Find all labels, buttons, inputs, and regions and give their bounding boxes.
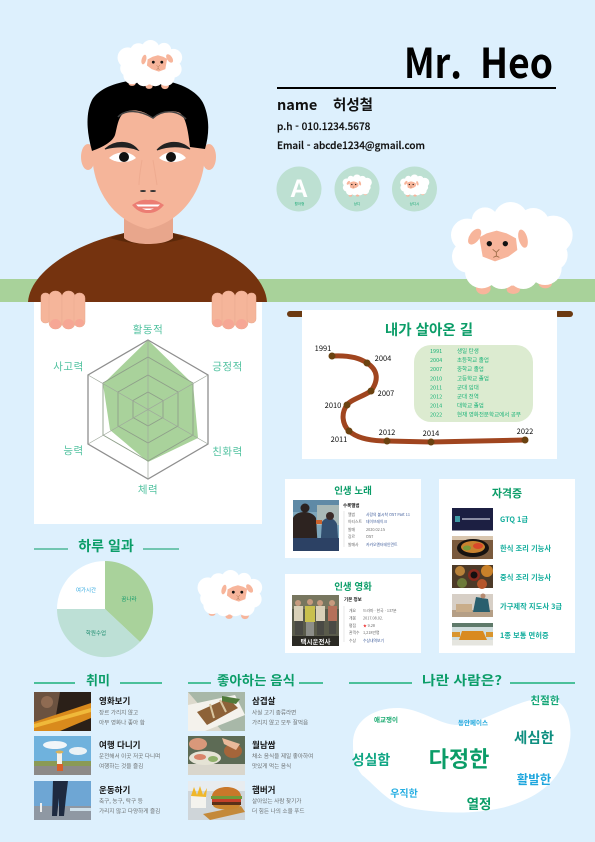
ears	[81, 144, 95, 170]
title: Mr.	[404, 30, 462, 90]
song info: 발매사	[348, 542, 359, 548]
hobby: exercise: 운동하기	[99, 784, 130, 796]
email: Email - abcde1234@gmail.com	[277, 137, 425, 152]
history list: 생일 탄생	[457, 347, 479, 355]
badges	[276, 166, 437, 212]
badge: A	[276, 166, 322, 212]
sheep on head	[118, 40, 182, 89]
pie label: leisure: 여가시간	[76, 586, 96, 594]
hobby: movies: 장르 가리지 않고	[99, 708, 138, 716]
cert 1	[452, 508, 528, 530]
section heading: daily routine: 하루 일과	[78, 536, 134, 556]
badge: A: 활아형	[295, 201, 304, 207]
radar label: 사고력: 사고력	[53, 359, 84, 374]
radar label: 능력: 능력	[63, 443, 84, 458]
korean name: 허성철	[333, 94, 373, 115]
movie info: 기본 정보	[344, 596, 362, 603]
hobby: travel: 여행하는 것을 즐김	[99, 762, 143, 770]
history list: 1991	[430, 347, 442, 355]
section heading: hobbies: 취미	[86, 670, 110, 689]
hobby: exercise	[34, 781, 160, 820]
radar label: 활동적: 활동적	[133, 322, 163, 337]
history list: 2022	[430, 410, 442, 418]
title: Heo	[480, 30, 553, 90]
heading: 내가 살아온 길	[385, 319, 473, 340]
hobby: movies	[34, 692, 145, 731]
cert 4	[452, 594, 562, 617]
title	[404, 30, 553, 90]
year labels: 2010	[325, 400, 341, 411]
history list: 2007	[430, 365, 442, 373]
history list: 초등학교 졸업	[457, 356, 489, 364]
hanging rod	[287, 311, 573, 317]
word: 열정: 열정	[467, 793, 491, 813]
name: name	[277, 94, 317, 115]
year labels: 2011	[331, 434, 347, 445]
cert 3	[452, 565, 551, 589]
big sheep	[451, 202, 573, 294]
neck	[124, 215, 173, 244]
section heading: who am I: 나란 사람은?	[422, 670, 502, 689]
hobby: movies: 아무 영화나 좋아 함	[99, 718, 145, 726]
eyes	[109, 152, 136, 162]
character: man with sheep	[28, 40, 267, 329]
heading: 인생 노래	[334, 483, 372, 497]
history list: 2004	[430, 356, 442, 364]
word: 동안페이스: 동안페이스	[458, 717, 488, 727]
word cloud	[352, 693, 570, 813]
contact info	[277, 94, 425, 152]
food: spring rolls	[188, 736, 313, 775]
food: hamburger: 햄버거	[252, 784, 275, 796]
cert 3: 중식 조리 기능사	[500, 573, 551, 583]
pie label: sleep: 꿈나라	[121, 595, 137, 603]
pie chart	[57, 561, 153, 657]
word: 애교쟁이: 애교쟁이	[374, 714, 398, 724]
history list: 중학교 졸업	[457, 365, 484, 373]
panel: life movie	[285, 574, 421, 653]
food: pork belly: 가리지 않고 모두 잘먹음	[252, 718, 308, 726]
year labels	[315, 343, 533, 445]
year labels: 2022	[517, 426, 533, 437]
word: 성실함: 성실함	[352, 750, 390, 770]
food: pork belly	[188, 692, 308, 731]
song info: 앨범	[348, 512, 355, 518]
history list: 군대 입대	[457, 384, 479, 392]
movie info: 평점	[349, 623, 356, 629]
food: spring rolls: 맛있게 먹는 음식	[252, 762, 291, 770]
food: hamburger	[188, 781, 305, 820]
heading: 자격증	[492, 485, 522, 501]
song info: 아티스트	[348, 519, 362, 525]
cert 5	[452, 623, 549, 646]
movie info	[344, 596, 397, 644]
panel: life road timeline	[287, 310, 573, 459]
year labels: 2012	[379, 427, 395, 438]
movie info: 수상내역보기	[363, 638, 384, 644]
year labels: 1991	[315, 343, 331, 354]
movie info: ★ 9.28	[363, 623, 375, 629]
movie info: 드라마 · 한국 · 137분	[363, 608, 397, 614]
food: pork belly: 삼겹살	[252, 695, 276, 707]
movie info: 1,218만명	[363, 630, 380, 636]
hobby: travel: 여행 다니기	[99, 739, 140, 751]
history list: 현재 영화전문학교에서 공부	[457, 410, 521, 418]
nose	[140, 190, 146, 192]
cert 5: 1종 보통 면허증	[500, 631, 549, 641]
movie info: 수상	[349, 638, 356, 644]
year labels: 2014	[423, 428, 439, 439]
badge: sheep 2: 상디시	[410, 201, 419, 207]
cert 2: 한식 조리 기능사	[500, 544, 551, 554]
food: spring rolls: 채소 음식을 제일 좋아하여	[252, 752, 313, 760]
year labels: 2007	[378, 388, 394, 399]
song info: 발매	[348, 527, 355, 533]
song info: 사랑의 불시착 OST Part 11	[366, 512, 410, 518]
history list	[414, 345, 533, 422]
eyebrows	[105, 142, 138, 150]
hobby: travel: 운전해서 이곳 저곳 다니며	[99, 752, 160, 760]
word: 친절한: 친절한	[531, 693, 560, 708]
word: 우직한: 우직한	[390, 785, 418, 800]
panel: life song	[285, 479, 421, 558]
phone: p.h - 010.1234.5678	[277, 118, 371, 133]
movie info: 관객수	[349, 630, 360, 636]
food: spring rolls: 월남쌈	[252, 739, 276, 751]
small sheep	[198, 570, 262, 619]
history list: 2010	[430, 374, 442, 382]
food: hamburger: 더 힘든 나의 소울 푸드	[252, 807, 305, 815]
section heading: favourite food: 좋아하는 음식	[217, 670, 295, 689]
song info: 장르	[348, 534, 355, 540]
shirt	[28, 233, 267, 302]
song info	[343, 502, 410, 548]
cert 1: GTQ 1급	[500, 515, 528, 525]
song info: 2020.02.15	[366, 528, 385, 533]
road path	[332, 356, 525, 442]
badge: sheep 1	[334, 166, 380, 212]
heading: 인생 영화	[334, 579, 372, 593]
badge: sheep 1: 상디	[354, 201, 360, 207]
hobby: travel	[34, 736, 160, 775]
radar label: 친화력: 친화력	[212, 444, 243, 459]
movie poster: 택시운전사	[301, 636, 330, 646]
movie info: 개봉	[349, 616, 356, 622]
history list: 대학교 졸업	[457, 402, 484, 410]
badge: A: A	[290, 175, 308, 203]
cert 4: 가구제작 지도사 3급	[500, 602, 562, 612]
pie label: class: 학원수업	[86, 629, 106, 637]
section heading: favourite food	[188, 670, 323, 689]
milestones	[328, 352, 528, 446]
word: 세심한: 세심한	[514, 727, 554, 748]
hobby: movies: 영화보기	[99, 695, 130, 707]
panel: radar chart card	[34, 302, 262, 524]
hands	[41, 291, 256, 329]
food: pork belly: 사실 고기 종류라면	[252, 708, 296, 716]
hair	[88, 80, 208, 151]
song info: 데이브레이크	[366, 519, 387, 525]
badge: sheep 2	[392, 166, 437, 212]
cert 2	[452, 536, 551, 559]
history list: 2014	[430, 402, 442, 410]
mouth	[132, 200, 164, 213]
history list: 2012	[430, 392, 442, 400]
history list: 2011	[430, 384, 442, 392]
panel: certificates	[439, 479, 575, 653]
year labels: 2004	[375, 353, 391, 364]
section heading: hobbies	[34, 670, 162, 689]
movie info: 2017.08.02.	[363, 616, 383, 622]
radar label: 긍정적: 긍정적	[212, 359, 243, 374]
hobby: exercise: 축구, 농구, 탁구 등	[99, 797, 143, 805]
hobby: exercise: 가리지 않고 다양하게 즐김	[99, 807, 160, 815]
radar label: 체력: 체력	[138, 482, 158, 497]
food: hamburger: 살아있는 사람 찾기가	[252, 797, 301, 805]
history list: 군대 전역	[457, 392, 479, 400]
movie info: 개요	[349, 608, 356, 614]
word: 다정한: 다정한	[429, 742, 489, 774]
song info: OST	[366, 535, 374, 540]
word: 활발한: 활발한	[517, 769, 552, 788]
song info: 수록앨범	[343, 502, 360, 509]
face	[92, 110, 205, 229]
album cover	[293, 500, 339, 551]
radar chart	[53, 322, 243, 497]
history list: 고등학교 졸업	[457, 374, 489, 382]
song info: 카카오엔터테인먼트	[366, 542, 398, 548]
